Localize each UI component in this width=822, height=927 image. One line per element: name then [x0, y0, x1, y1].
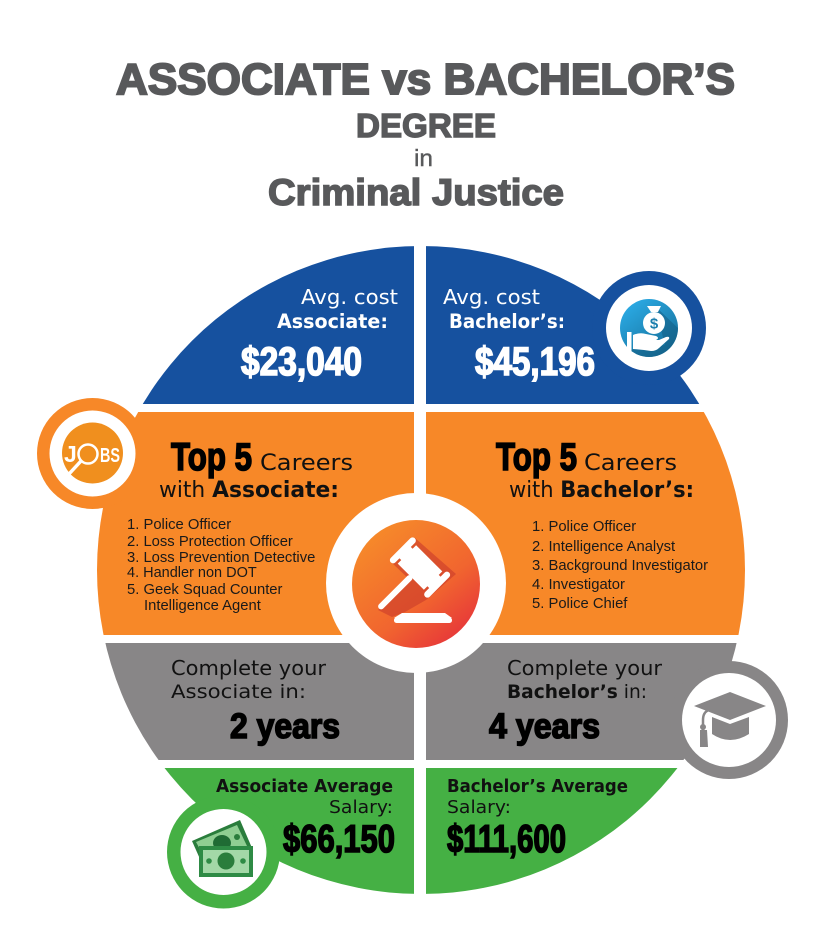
- heading: careers right: Careers: [584, 451, 677, 476]
- number: bachelor cost: $45,196: [475, 340, 595, 384]
- label: salary left: Salary:: [329, 797, 393, 818]
- label: associate average: Associate Average: [216, 776, 393, 797]
- icon: cash badge: [167, 796, 280, 908]
- panel: bachelor salary: [447, 776, 628, 861]
- heading: top 5 right: Top 5: [496, 436, 577, 479]
- panel: associate cost text: [241, 285, 398, 384]
- list: bachelor careers: 1. Police Officer: [532, 519, 636, 535]
- label: associate: Associate:: [277, 310, 388, 333]
- panel: associate duration: [171, 656, 340, 746]
- list: bachelor careers: 5. Police Chief: [532, 596, 628, 612]
- band: gray right: [426, 643, 750, 760]
- number: associate cost: $23,040: [241, 340, 362, 384]
- list: bachelor careers: 3. Background Investigator: [532, 558, 708, 574]
- title: [116, 55, 735, 213]
- number: bachelor salary: $111,600: [447, 818, 566, 861]
- panel: bachelor duration: [489, 656, 663, 746]
- title line: Criminal Justice: Criminal Justice: [268, 172, 564, 213]
- band: gray left: [90, 643, 414, 760]
- number: 2 years: 2 years: [230, 707, 340, 746]
- label: bachelor's in: Bachelor’s in:: [507, 681, 647, 703]
- panel: circular quadrant bands: [90, 240, 750, 898]
- band: orange left: [90, 412, 414, 635]
- title line: Degree: DEGREE: [356, 107, 496, 144]
- number: associate salary: $66,150: [283, 818, 395, 861]
- list: associate careers: Intelligence Agent: [144, 598, 261, 614]
- band: green left: [164, 768, 414, 894]
- label: associate in: Associate in:: [171, 681, 306, 703]
- list: associate careers: [127, 517, 315, 614]
- list: associate careers: 5. Geek Squad Counter: [127, 582, 283, 598]
- list: associate careers: 2. Loss Protection Officer: [127, 534, 293, 550]
- label: complete your associate: Complete your: [171, 656, 327, 680]
- band: blue left: [142, 246, 414, 404]
- panel: top 5 careers with associate: [127, 436, 353, 614]
- icon: gavel center badge: [326, 493, 506, 673]
- icon: jobs magnifier badge: J: [64, 441, 77, 467]
- band: green right: [426, 768, 678, 894]
- band: orange right: [426, 412, 750, 635]
- title line: in: in: [414, 145, 433, 171]
- label: avg cost bachelor: Avg. cost: [443, 285, 540, 309]
- list: bachelor careers: [532, 519, 708, 612]
- list: associate careers: 1. Police Officer: [127, 517, 231, 533]
- list: associate careers: 4. Handler non DOT: [127, 565, 257, 581]
- icon: money bag in hand badge: $: [650, 316, 659, 332]
- panel: associate salary: [216, 776, 395, 861]
- title line: Associate vs Bachelor's: ASSOCIATE vs BACHELOR’S: [116, 55, 735, 104]
- panel: bachelor cost text: [443, 285, 595, 384]
- label: salary right: Salary:: [447, 797, 511, 818]
- number: 4 years: 4 years: [489, 707, 600, 746]
- band: blue right: [426, 246, 700, 404]
- icon: money bag in hand badge: [600, 271, 706, 376]
- icon: graduation cap badge: [670, 661, 788, 779]
- list: bachelor careers: 4. Investigator: [532, 577, 625, 593]
- label: complete your bachelor: Complete your: [507, 656, 663, 680]
- panel: top 5 careers with bachelor's: [496, 436, 708, 612]
- label: avg cost associate: Avg. cost: [301, 285, 398, 309]
- icon: jobs magnifier badge: BS: [100, 445, 120, 467]
- heading: careers left: Careers: [260, 451, 353, 476]
- list: associate careers: 3. Loss Prevention Detective: [127, 550, 315, 566]
- heading: with bachelor's: with Bachelor’s:: [509, 478, 694, 503]
- list: bachelor careers: 2. Intelligence Analyst: [532, 539, 675, 555]
- heading: top 5 left: Top 5: [171, 436, 252, 479]
- icon: jobs magnifier badge: [37, 398, 148, 509]
- label: bachelor's average: Bachelor’s Average: [447, 776, 628, 797]
- heading: with associate: with Associate:: [159, 478, 339, 503]
- label: bachelor's: Bachelor’s:: [449, 310, 565, 333]
